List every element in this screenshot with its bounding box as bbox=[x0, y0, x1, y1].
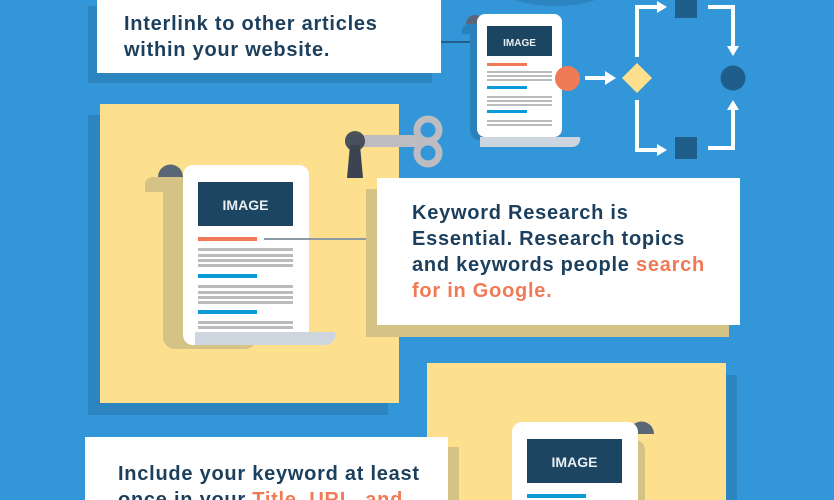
icon: document in square 1: IMAGE bbox=[223, 197, 268, 213]
panel: yellow square 2 bbox=[437, 375, 737, 500]
text: include keyword bbox=[118, 463, 420, 500]
text: keyword research: Keyword Research is bbox=[412, 202, 629, 224]
text: keyword research bbox=[412, 202, 705, 302]
text: keyword research: for in Google. bbox=[412, 280, 552, 302]
top arc bbox=[495, 0, 615, 6]
text: interlink: within your website. bbox=[124, 39, 330, 61]
icon: document in square 2 bbox=[512, 422, 654, 500]
panel: yellow square 1 bbox=[88, 115, 388, 415]
icon: document in square 1 bbox=[145, 164, 336, 349]
panel: interlink box bbox=[88, 6, 432, 83]
text: interlink: Interlink to other articles bbox=[124, 13, 378, 35]
text: keyword research: Essential. Research topics bbox=[412, 228, 685, 250]
text: include keyword: Include your keyword at least bbox=[118, 463, 420, 485]
connector line middle bbox=[264, 238, 377, 240]
text: interlink bbox=[124, 13, 378, 61]
connector line top bbox=[441, 41, 481, 43]
icon: top document bbox=[462, 14, 580, 147]
panel: keyword box bbox=[366, 189, 729, 337]
icon: key and keyhole bbox=[345, 116, 442, 178]
panel: include keyword box bbox=[96, 447, 459, 500]
flowchart bbox=[585, 0, 746, 159]
icon: document in square 2: IMAGE bbox=[552, 454, 597, 470]
icon: top document: IMAGE bbox=[503, 38, 536, 49]
icon: orange circle bbox=[555, 66, 580, 91]
text: keyword research: and keywords people search bbox=[412, 254, 705, 276]
